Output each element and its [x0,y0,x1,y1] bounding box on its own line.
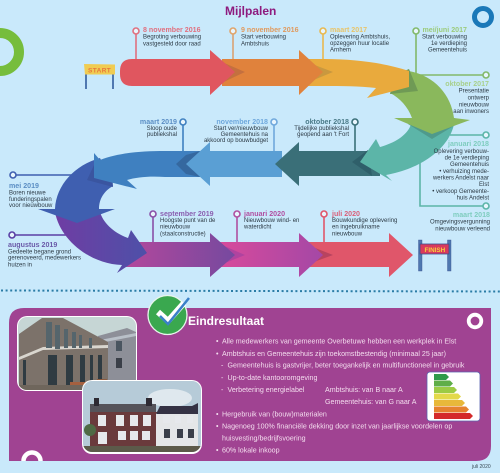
milestone: januari 2020: waterdicht [243,225,272,231]
milestone: maart 2019 [140,118,178,138]
milestone: mei 2019: Boren nieuwe [9,190,46,196]
result list: - [221,374,224,382]
milestone: oktober 2018: Tijdelijke publiekshal [294,126,349,132]
arrow: red [120,50,245,95]
milestone: oktober 2017: oktober 2017 [445,80,489,88]
result list: Alle medewerkers van gemeente Overbetuwe hebben een werkplek in Elst [222,338,456,346]
milestone: juli 2020 [331,210,397,237]
result list: Up-to-date kantooromgeving [228,374,317,382]
milestone: augustus 2019 [8,241,81,268]
milestone: mei 2019: voor nieuwbouw [9,203,53,209]
milestone: augustus 2019: augustus 2019 [8,241,57,249]
milestone: oktober 2017: nieuwbouw [459,102,490,108]
milestone: juli 2020: juli 2020 [331,210,360,218]
arrow: yellow curve [305,59,418,98]
milestone: januari 2018: Oplevering verbouw- [434,149,489,155]
result list: 60% lokale inkoop [222,446,280,454]
milestone: maart 2018: maart 2018 [453,211,490,219]
milestone: 8 november 2016 [143,26,201,48]
result list: • [216,338,219,346]
milestone: mei 2019 [9,182,53,209]
milestone: juli 2020: en ingebruikname [332,225,380,231]
milestone: november 2018: Start ver/nieuwbouw [214,126,269,132]
milestone: augustus 2019: Gedeelte begane grond [8,249,71,255]
milestone: mei/juni 2017: Gemeentehuis [428,48,467,54]
arrow: green curve [390,71,470,139]
milestone: 8 november 2016: vastgesteld door raad [143,42,201,48]
milestone: september 2019: Hoogste punt van de [160,218,216,224]
milestone: november 2018: Gemeentehuis na [221,132,269,138]
result list: Gemeentehuis is gastvrijer, beter toegankelijk en multifunctioneel in gebruik [228,362,465,370]
result list: Verbetering energielabel [228,386,305,394]
result list: - [221,386,224,394]
milestone markers [9,28,489,238]
milestone: maart 2017: opzeggen huur locatie [330,41,390,47]
arrow: light blue [176,142,282,186]
arrow: dark teal [275,142,380,186]
milestone: maart 2017 [330,26,390,54]
milestone: juli 2020: nieuwbouw [332,231,363,237]
milestone: augustus 2019: gerenoveerd, medewerkers [8,256,81,262]
icon: green ring [0,33,19,71]
milestone: oktober 2017 [445,80,490,115]
milestone: januari 2018: Gemeentehuis [450,162,489,168]
milestone: mei 2019: mei 2019 [9,182,39,190]
milestone: 8 november 2016: Begroting verbouwing [143,34,201,40]
milestone: 9 november 2016: Ambtshuis [241,42,269,48]
milestone: oktober 2018: oktober 2018 [305,118,349,126]
result list: Hergebruik van (bouw)materialen [222,410,327,418]
result list: • [216,446,219,454]
icon: finish banner: FINISH [424,247,446,254]
milestone: januari 2018: januari 2018 [447,140,489,148]
milestone: januari 2018: Elst [479,182,489,188]
result list: huisvesting/bedrijfsvoering [222,434,306,442]
milestone: maart 2019: publiekshal [147,132,177,138]
icon: start banner: START [88,68,111,74]
milestone: 8 november 2016: 8 november 2016 [143,26,201,34]
heading: eindresultaat: Eindresultaat [188,314,264,328]
milestone: september 2019: (staalconstructie) [160,231,206,237]
icon: finish banner [418,240,451,271]
arrow: dark blue curve [38,158,115,223]
milestone: november 2018 [204,118,269,144]
milestone: maart 2017: maart 2017 [330,26,367,34]
milestone: maart 2018 [430,211,490,232]
milestone: mei/juni 2017: Start verbouwing [422,34,467,40]
milestone: 9 november 2016: Start verbouwing [241,34,286,40]
result list: Ambtshuis en Gemeentehuis zijn toekomstbestendig (minimaal 25 jaar) [222,350,446,358]
arrow: mid blue curve [87,151,205,189]
milestone: juli 2020: Bouwkundige oplevering [332,218,397,224]
milestone: augustus 2019: huizen in [8,262,32,268]
milestone: oktober 2018 [294,118,349,138]
milestone: september 2019: nieuwbouw [160,225,191,231]
milestone: 9 november 2016 [241,26,299,48]
icon: start banner [84,64,115,89]
milestone: januari 2018: de 1e verdieping [445,156,489,162]
milestone: maart 2017: Arnhem [330,48,351,54]
milestone: maart 2018: nieuwbouw verleend [435,226,490,232]
icon: white ring top right [469,315,481,327]
result list [216,338,465,454]
milestone: januari 2018: werkers Andelst naar [432,176,489,182]
milestone: november 2018: november 2018 [216,118,268,126]
icon: energy label chart [427,372,480,421]
date note: juli 2020 [471,464,491,470]
icon: green check badge [148,296,189,334]
result list: Nagenoeg 100% financiële dekking door inzet van jaarlijkse voordelen op [222,422,452,430]
result list: - [221,362,224,370]
milestone: januari 2018: huis Andelst [457,195,489,201]
result list: Gemeentehuis: van G naar A [325,398,417,406]
milestone: oktober 2017: ontwerp [468,96,490,102]
milestone: maart 2017: Oplevering Ambtshuis, [330,34,390,40]
milestone: januari 2020 [243,210,299,231]
arrow: teal curve [360,118,455,181]
milestone: oktober 2017: aan inwoners [453,109,489,115]
photo: gemeentehuis old building [82,380,202,454]
arrow: final red [300,233,413,277]
panel: eindresultaat [9,296,491,470]
milestone: januari 2018: • verkoop Gemeente- [432,189,489,195]
milestone: 9 november 2016: 9 november 2016 [241,26,299,34]
milestone: maart 2019: maart 2019 [140,118,177,126]
arrow: magenta [125,233,245,277]
milestone: oktober 2018: geopend aan 't Fort [297,132,349,138]
milestone: oktober 2017: Presentatie [459,89,490,95]
result list: • [216,422,219,430]
result list: • [216,410,219,418]
title: Mijlpalen [225,4,276,18]
milestone: mei/juni 2017 [422,26,467,54]
result list: Ambtshuis: van B naar A [325,386,403,394]
milestone: maart 2018: Omgevingsvergunning [430,220,490,226]
milestone: januari 2018: • verhuizing mede- [439,169,489,175]
milestone: januari 2020: januari 2020 [243,210,285,218]
result list: • [216,350,219,358]
arrow: purple curve [55,212,147,273]
milestone: januari 2018 [432,140,489,201]
milestone: mei 2019: funderingspalen [9,197,52,203]
arrow: pink [215,233,333,277]
milestone: januari 2020: Nieuwbouw wind- en [244,218,299,224]
flowing arrow path [38,50,470,277]
milestone: maart 2019: Sloop oude [147,126,178,132]
timeline connector lines [15,34,483,244]
icon: white ring bottom left [21,450,43,461]
milestone: mei/juni 2017: 1e verdieping [431,41,467,47]
milestone: november 2018: akkoord op bouwbudget [204,138,268,144]
milestone: september 2019: september 2019 [160,210,214,218]
photo: ambtshuis new building [17,316,137,391]
milestone: mei/juni 2017: mei/juni 2017 [422,26,467,34]
icon: blue ring [474,8,492,26]
arrow: orange [222,50,333,95]
milestone: september 2019 [160,210,216,237]
